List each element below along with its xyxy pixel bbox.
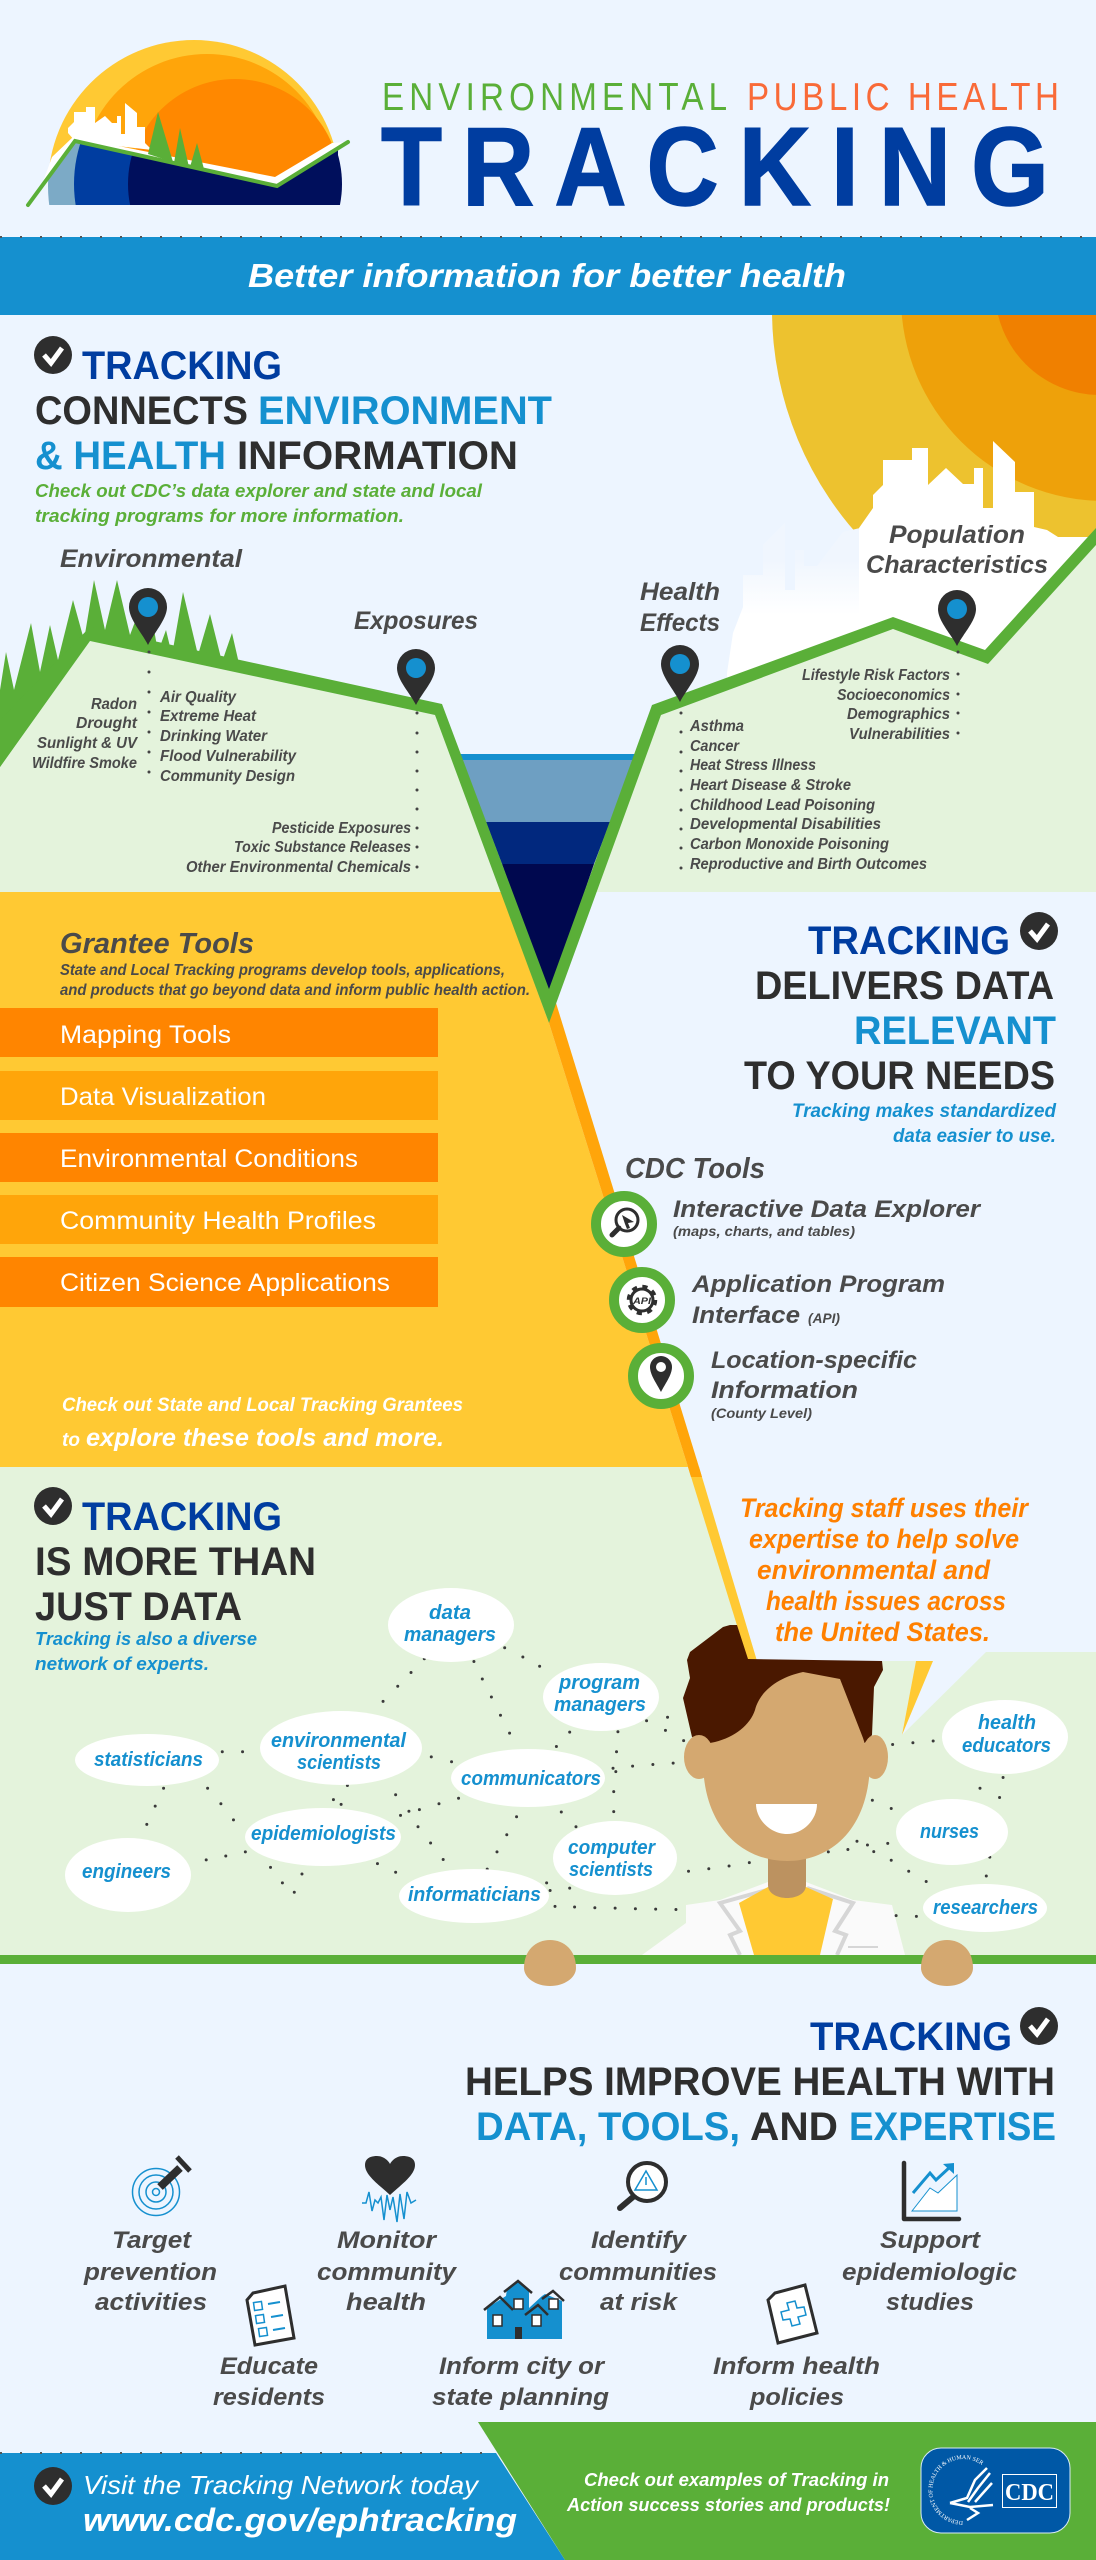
icon: medical file (768, 2285, 817, 2343)
bubble: researchers: researchers (933, 1897, 1038, 1919)
item: identify communities at risk (559, 2227, 717, 2316)
bubble: computer scientists (553, 1821, 677, 1895)
tool: location-specific information: Location-specific (711, 1347, 917, 1374)
heading: helps improve health: TRACKING (810, 2015, 1012, 2059)
label: health effects list: Developmental Disabilities (690, 816, 881, 833)
tool: location-specific information: (County Level) (711, 1405, 812, 1421)
label: exposures list (186, 607, 478, 876)
footer panel: success stories: Check out examples of Tracking in (584, 2469, 889, 2490)
footer panel: visit the tracking network: Visit the Tracking Network today (83, 2470, 480, 2500)
item: monitor community health (317, 2227, 458, 2316)
subheading: standardized data: Tracking makes standardized (792, 1101, 1056, 1122)
bubble: program managers (543, 1663, 659, 1731)
title: TRACKING (381, 105, 1049, 229)
panel: grantee tools yellow (0, 892, 688, 1467)
callout: staff expertise: expertise to help solve (749, 1524, 1019, 1554)
bubble: environmental scientists: scientists (297, 1752, 381, 1774)
label: health effects list: Carbon Monoxide Poisoning (690, 836, 889, 853)
heading: helps improve health: EXPERTISE (849, 2105, 1056, 2149)
pin: health effects (661, 645, 699, 702)
heading: tracking delivers data: DELIVERS DATA (755, 964, 1054, 1008)
item: target prevention activities: activities (95, 2289, 207, 2316)
heading: helps improve health: AND (750, 2105, 838, 2149)
bubble: data managers (388, 1588, 514, 1662)
label: exposures list: Pesticide Exposures (272, 820, 411, 837)
heading: more than just data: TRACKING (82, 1495, 282, 1539)
item: support epidemiologic studies: epidemiologic (842, 2259, 1017, 2286)
speech bubble (688, 1467, 1096, 1735)
label: health effects list: Reproductive and Birth Outcomes (690, 856, 927, 873)
pin: environmental (129, 588, 167, 645)
bubble: epidemiologists (245, 1808, 401, 1866)
label: environmental list: Extreme Heat (160, 708, 257, 725)
callout: explore these tools (62, 1395, 463, 1452)
subheading: standardized data: data easier to use. (893, 1126, 1056, 1147)
subheading: check out data explorer: Check out CDC’s data explorer and state and local (35, 481, 483, 501)
bubble: statisticians: statisticians (94, 1749, 203, 1771)
icon: heart and pulse (362, 2156, 416, 2222)
heading: helps improve health: HELPS IMPROVE HEALTH WITH (465, 2060, 1055, 2104)
tool: application program interface: Application Program (691, 1271, 945, 1298)
bubble: informaticians: informaticians (408, 1884, 541, 1906)
dotted connectors: expert network (147, 1648, 1003, 1916)
heading: tracking delivers data: TO YOUR NEEDS (744, 1054, 1055, 1098)
tool: application program interface (614, 1271, 945, 1329)
logo: cdc and hhs: DEPARTMENT OF HEALTH & HUMAN SERVICES·USA (928, 2455, 984, 2525)
callout: staff expertise: health issues across (766, 1586, 1006, 1616)
label: environmental list: Flood Vulnerability (160, 748, 297, 765)
pin: exposures (397, 649, 435, 705)
label: environmental list (32, 545, 297, 785)
tool: application program interface: Interface (692, 1302, 800, 1329)
label: environmental list: Drought (76, 715, 138, 732)
item: inform health policies (713, 2353, 880, 2411)
item: monitor community health: community (317, 2259, 458, 2286)
heading: cdc tools: CDC Tools (625, 1153, 765, 1185)
trees (0, 580, 240, 767)
label: population characteristics list: Vulnerabilities (849, 726, 950, 743)
heading: more than just data: IS MORE THAN (35, 1540, 316, 1584)
tool: interactive data explorer (596, 1196, 982, 1252)
item: target prevention activities: prevention (83, 2259, 217, 2286)
footer panel: visit the tracking network: www.cdc.gov/ephtracking (83, 2502, 517, 2538)
figure: face (700, 1672, 870, 1861)
bubble: computer scientists: scientists (569, 1859, 653, 1881)
heading: tracking connects environment and health: CONNECTS (35, 389, 248, 433)
bubble: researchers (923, 1884, 1047, 1932)
heading: tracking connects environment and health: TRACKING (82, 344, 282, 388)
bubble: engineers (65, 1838, 191, 1912)
heading: tracking connects environment and health: INFORMATION (237, 434, 518, 478)
heading: helps improve health: DATA, TOOLS, (476, 2105, 740, 2149)
green ridge line (0, 528, 1096, 1023)
item: inform city or state planning: state planning (432, 2384, 609, 2411)
dotted connectors: map (149, 652, 958, 868)
bar: citizen science applications (0, 1257, 438, 1307)
label: environmental list: Radon (91, 696, 137, 713)
bar: environmental conditions (0, 1133, 438, 1182)
bar: environmental conditions: Environmental Conditions (60, 1145, 358, 1173)
label: environmental list: Air Quality (159, 689, 237, 706)
item: support epidemiologic studies: studies (886, 2289, 974, 2316)
figure: hands (524, 1940, 973, 1986)
icon: rising line chart (904, 2163, 959, 2219)
bubble: health educators (942, 1700, 1068, 1774)
label: exposures list: Toxic Substance Releases (234, 839, 411, 856)
icon: magnifier with warning (620, 2163, 666, 2208)
bubble: epidemiologists: epidemiologists (251, 1823, 396, 1845)
figure: scientist coat and neck (642, 1855, 905, 1955)
label: population characteristics list: Lifestyle Risk Factors (802, 667, 950, 684)
heading: tracking delivers data: TRACKING (808, 919, 1010, 963)
item: target prevention activities: Target (112, 2227, 192, 2254)
heading: grantee tools: State and Local Tracking programs develop tools, applications, (60, 962, 505, 979)
green ledge (0, 1955, 1096, 1964)
heading: helps improve health (465, 2007, 1058, 2149)
title: PUBLIC HEALTH (747, 74, 1059, 119)
footer panel: visit the tracking network (0, 2453, 565, 2560)
tool: application program interface: (API) (808, 1310, 840, 1326)
footer panel: success stories (478, 2422, 1096, 2560)
label: environmental list: Community Design (160, 768, 295, 785)
label: environmental list: Environmental (60, 545, 243, 573)
heading: grantee tools: and products that go beyond data and inform public health action. (60, 982, 530, 999)
label: environmental list: Drinking Water (160, 728, 268, 745)
bar: citizen science applications: Citizen Science Applications (60, 1269, 390, 1297)
panel: water in the valley (459, 754, 636, 995)
pin: population characteristics (938, 590, 976, 646)
bubble: environmental scientists (260, 1711, 422, 1785)
city skyline (727, 441, 1096, 720)
label: health effects list: Asthma (689, 718, 744, 735)
label: exposures list: Exposures (354, 607, 478, 635)
bubble: data managers: data (429, 1602, 471, 1624)
bar: data visualization: Data Visualization (60, 1083, 266, 1111)
tool: location-specific information (633, 1347, 917, 1421)
bubble: program managers: managers (554, 1694, 646, 1716)
panel: experts network background (0, 1467, 1096, 1955)
item: identify communities at risk: communities (559, 2259, 717, 2286)
sun top right (772, 315, 1096, 537)
callout: staff expertise: environmental and (757, 1555, 990, 1585)
bar: community health profiles: Community Health Profiles (60, 1207, 376, 1235)
heading: tracking connects environment and health: ENVIRONMENT (258, 389, 552, 433)
subheading: standardized data (792, 1101, 1056, 1147)
item: target prevention activities (83, 2227, 217, 2316)
item: identify communities at risk: at risk (600, 2289, 679, 2316)
bar: community health profiles (0, 1195, 438, 1244)
label: environmental list: Wildfire Smoke (32, 755, 137, 772)
heading: grantee tools (60, 928, 530, 999)
heading: grantee tools: Grantee Tools (60, 928, 254, 960)
callout: staff expertise: Tracking staff uses their (740, 1493, 1029, 1523)
label: environmental list: Sunlight & UV (37, 735, 138, 752)
label: population characteristics list (802, 521, 1048, 743)
bubble: engineers: engineers (82, 1861, 171, 1883)
bar: mapping tools: Mapping Tools (60, 1021, 231, 1049)
bubble: health educators: health (978, 1712, 1036, 1734)
item: support epidemiologic studies (842, 2227, 1017, 2316)
bubble: health educators: educators (962, 1735, 1051, 1757)
heading: more than just data: JUST DATA (35, 1585, 242, 1629)
item: educate residents: Educate (220, 2353, 318, 2380)
item: inform health policies: policies (749, 2384, 844, 2411)
label: health effects list: Effects (640, 609, 720, 637)
tool: interactive data explorer: Interactive Data Explorer (673, 1196, 982, 1223)
header logo: sun and ridge (26, 40, 350, 208)
item: inform city or state planning (432, 2353, 609, 2411)
subheading: network of experts: Tracking is also a diverse (35, 1628, 257, 1649)
heading: tracking connects environment and health (34, 336, 552, 478)
banner: tagline: Better information for better health (248, 257, 846, 294)
callout: explore these tools: to (62, 1430, 80, 1451)
callout: explore these tools: Check out State and Local Tracking Grantees (62, 1395, 463, 1416)
figure: ears (684, 1735, 888, 1779)
item: monitor community health: health (346, 2289, 426, 2316)
label: health effects list: Health (640, 578, 720, 606)
footer panel: success stories: Action success stories and products! (566, 2494, 890, 2515)
heading: tracking connects environment and health: & HEALTH (35, 434, 226, 478)
item: identify communities at risk: Identify (591, 2227, 688, 2254)
title: ENVIRONMENTAL (382, 74, 727, 119)
heading: more than just data (34, 1487, 316, 1629)
label: population characteristics list: Socioeconomics (837, 687, 950, 704)
bubble: communicators: communicators (461, 1768, 601, 1790)
orange stripe (549, 990, 699, 1467)
tool: location-specific information: Information (711, 1377, 858, 1404)
item: educate residents: residents (213, 2384, 325, 2411)
label: health effects list: Cancer (690, 738, 740, 755)
item: inform city or state planning: Inform city or (439, 2353, 606, 2380)
item: educate residents (213, 2353, 325, 2411)
heading: tracking delivers data (744, 912, 1058, 1098)
callout: staff expertise: the United States. (775, 1617, 990, 1647)
label: population characteristics list: Population (889, 521, 1025, 549)
icon: target and dart (132, 2157, 190, 2216)
bubble: environmental scientists: environmental (271, 1730, 406, 1752)
bubble: informaticians (399, 1869, 549, 1923)
callout: explore these tools: explore these tools and more. (86, 1424, 444, 1452)
tool: application program interface: API (632, 1296, 652, 1306)
bubble: computer scientists: computer (568, 1837, 656, 1859)
heading: tracking delivers data: RELEVANT (854, 1009, 1056, 1053)
subheading: check out data explorer (35, 481, 483, 526)
callout: staff expertise (740, 1493, 1029, 1647)
item: support epidemiologic studies: Support (880, 2227, 981, 2254)
panel: light green ground (0, 545, 1096, 892)
figure: hair (683, 1625, 883, 1748)
bar: mapping tools (0, 1008, 438, 1057)
bubble: statisticians (75, 1734, 219, 1786)
bubble: nurses (896, 1799, 1008, 1865)
logo: cdc and hhs: CDC (1005, 2480, 1054, 2506)
label: health effects list: Heart Disease & Stroke (690, 777, 851, 794)
label: exposures list: Other Environmental Chemicals (186, 859, 411, 876)
label: population characteristics list: Characteristics (866, 551, 1048, 579)
label: health effects list (640, 578, 927, 873)
subheading: check out data explorer: tracking programs for more information. (35, 506, 404, 526)
figure: smile (756, 1804, 817, 1834)
bubble: data managers: managers (404, 1624, 496, 1646)
label: health effects list: Childhood Lead Poisoning (690, 797, 875, 814)
bubble: program managers: program (558, 1672, 640, 1694)
label: population characteristics list: Demographics (847, 706, 950, 723)
bar: data visualization (0, 1071, 438, 1120)
subheading: network of experts: network of experts. (35, 1653, 209, 1674)
tool: interactive data explorer: (maps, charts, and tables) (673, 1223, 855, 1239)
label: health effects list: Heat Stress Illness (690, 757, 816, 774)
banner: tagline (0, 237, 1096, 315)
item: monitor community health: Monitor (337, 2227, 438, 2254)
icon: houses (484, 2281, 564, 2339)
item: inform health policies: Inform health (713, 2353, 880, 2380)
icon: checklist clipboard (247, 2286, 294, 2345)
bubble: communicators (451, 1749, 605, 1807)
bubble: nurses: nurses (920, 1821, 979, 1843)
subheading: network of experts (35, 1628, 257, 1674)
